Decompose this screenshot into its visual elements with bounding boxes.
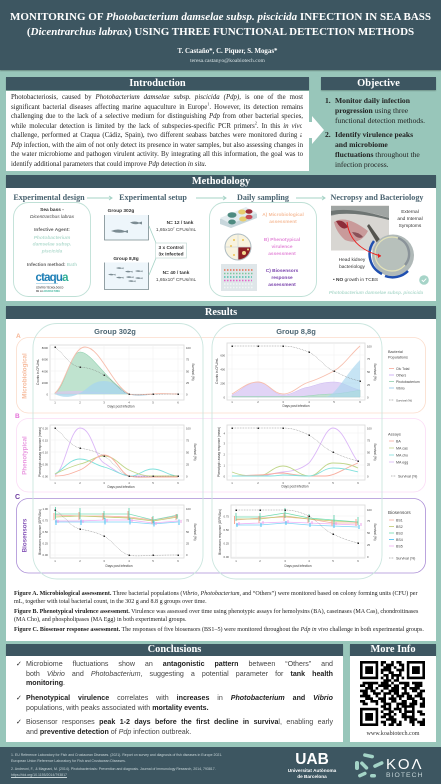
chart: C 302g: 50	[186, 530, 190, 534]
panel: experimental design box: ctaqua	[36, 272, 69, 284]
chart: C 8,8g: Survival (%)	[373, 523, 377, 541]
chart: C 8,8g: 5	[332, 559, 334, 563]
panel: introduction text: Pdp infection, with the aim of not only detect its presence in water samples, but also assessing changes in	[11, 142, 303, 148]
symptoms label	[397, 209, 423, 229]
heading: more info: More Info	[370, 644, 416, 655]
chart: A 8,8g: 25	[367, 383, 371, 387]
panel: conclusions	[6, 656, 343, 742]
panel: daily sampling box: assessment	[269, 219, 297, 225]
objective list: 2.	[325, 130, 331, 139]
objective list: and microbiome	[335, 140, 388, 149]
chart: B 302g: 2	[79, 481, 81, 485]
chart: B 8,8g: 1	[223, 464, 225, 468]
heading: experimental design: Experimental design	[13, 193, 85, 202]
chart: B 8,8g: 0	[223, 474, 225, 478]
heading: methodology	[6, 175, 436, 188]
chart: A 302g: 4000	[42, 370, 48, 374]
chart: B 302g: 5	[152, 481, 154, 485]
chart: A 302g: 50	[186, 370, 190, 374]
panel: experimental design box: Photobacterium	[34, 235, 71, 241]
references	[11, 752, 222, 778]
chart: B 302g: 4	[128, 481, 130, 485]
panel: experimental design box: DE LA ACUICULTURA	[36, 290, 60, 293]
chart: C 8,8g	[218, 505, 377, 568]
group 302g tank: Group 302g	[108, 208, 134, 214]
setup numbers: 7	[173, 226, 175, 230]
chart: A 8,8g: 0	[223, 396, 225, 400]
chart: B 8,8g: 75	[367, 438, 371, 442]
references: 1. EU Reference Laboratory for Fish and Crustacean Diseases. (2021). Report on survey and diagnosis of fish diseases in Europe 2021.	[11, 752, 222, 756]
row frame A microbiological: A	[16, 333, 21, 340]
figure captions: mL, together with total bacterial count, in the 302 g and 8.8 g groups over time.	[14, 599, 207, 605]
legend: biosensors: BS2	[396, 525, 403, 529]
references: European Union Reference Laboratory for Fish and Crustacean Diseases.	[11, 758, 126, 762]
panel: conclusions: populations, with peaks associated with mortality events.	[26, 704, 209, 712]
chart: C 302g: 6	[177, 559, 179, 563]
panel: daily sampling box: assessment	[268, 251, 296, 257]
chart: B 8,8g: 4	[223, 432, 225, 436]
symptoms label: External	[401, 209, 419, 215]
group frame 8,8g: Group 8,8g	[276, 327, 316, 336]
group 8,8g tank: Group 8,8g	[113, 256, 139, 262]
icon: culture plate	[220, 207, 257, 228]
panel: introduction text	[6, 91, 309, 171]
chart: C 302g: 1	[54, 559, 56, 563]
chart: C 302g: Survival (%)	[193, 523, 197, 541]
chart: C 8,8g: 3	[284, 559, 286, 563]
chart: A 8,8g: 200	[220, 382, 225, 386]
objective list: infection process.	[335, 160, 389, 168]
no growth note: • NO growth in TCBS	[333, 277, 378, 283]
authors: T. Castaño*, C. Piquer, S. Mogas*	[178, 48, 277, 55]
chart: A 302g	[36, 345, 195, 408]
chart: B 8,8g: 25	[367, 462, 371, 466]
references: https://doi.org/10.1155/2014/793817	[11, 773, 67, 777]
row frame A microbiological: Microbiological	[22, 353, 28, 399]
chart: A 302g: 6	[177, 400, 179, 404]
heading: experimental setup: Experimental setup	[119, 193, 187, 202]
chart: B 302g: 0.10	[43, 450, 48, 454]
chart: B 302g: 0.00	[43, 474, 48, 478]
chart: A 302g: 2000	[42, 381, 48, 385]
logo: KOA Biotech	[355, 753, 423, 779]
chart: C 8,8g: 50	[367, 531, 371, 535]
chart: C 302g	[38, 505, 197, 568]
head kidney label: Head kidney	[339, 257, 366, 263]
chart: A 8,8g	[215, 343, 377, 408]
arrow: introduction to objective	[302, 116, 324, 144]
heading: necropsy and bacteriology: Necropsy and Bacteriology	[331, 193, 423, 202]
legend: assays: MA egg	[396, 460, 408, 464]
chart: B 302g: 75	[186, 438, 190, 442]
panel: daily sampling box: A) Microbiological	[262, 212, 304, 218]
legend: biosensors	[388, 510, 415, 560]
setup numbers: 1,65x10	[156, 228, 173, 233]
heading: daily sampling: Daily sampling	[237, 193, 289, 202]
legend: biosensors: BS1	[396, 518, 403, 522]
panel: daily sampling box: assessment	[268, 282, 296, 288]
chart: A 8,8g: 600	[220, 354, 225, 358]
chart: A 302g: 2	[79, 400, 81, 404]
group frame 8,8g	[212, 324, 382, 579]
objective list: fluctuations throughout the	[335, 150, 420, 159]
title: (Dicentrarchus labrax) USING THREE FUNCTIONAL DETECTION METHODS	[27, 26, 414, 38]
legend: bacterial populations: Vibrio	[396, 386, 405, 390]
header band	[0, 0, 441, 70]
chart: C 8,8g: 0.75	[224, 514, 229, 518]
chart: A 8,8g: 0	[367, 396, 369, 400]
chart: C 302g: 5	[152, 559, 154, 563]
panel: experimental design box: Infective Agent:	[34, 227, 70, 233]
chart: B 8,8g: 4	[308, 481, 310, 485]
footer band	[0, 747, 441, 784]
chart: C 8,8g: 0	[367, 555, 369, 559]
setup numbers: N= 40 / tank	[163, 270, 190, 276]
chart: A 302g: 100	[186, 346, 191, 350]
chart: C 302g: 0	[186, 553, 188, 557]
figure captions	[14, 590, 424, 633]
panel: introduction text: while molecular detection is limited by the lack of subspecies-specific PCR primers2. In this in vivo	[11, 120, 303, 130]
panel: experimental design box: CENTRO TECNOLÓGICO	[36, 286, 64, 290]
panel: conclusions: ✓	[16, 694, 22, 702]
row frame B phenotypical: Phenotypical	[22, 436, 28, 475]
control and infected box: 3x Infected	[158, 252, 184, 258]
photo: necropsy of fish	[331, 206, 389, 250]
chart: B 8,8g: 2	[257, 481, 259, 485]
heading: conclusions: Conclusions	[148, 644, 201, 655]
chart: A 302g: 5	[152, 400, 154, 404]
row frame B phenotypical: B	[15, 413, 20, 420]
chart: C 8,8g: 0.25	[224, 542, 229, 546]
legend: assays: BA	[396, 440, 401, 444]
heading: introduction	[6, 77, 309, 90]
row frame B phenotypical	[15, 413, 426, 492]
logo: KOA Biotech: KOΛ	[386, 756, 423, 773]
heading: objective: Objective	[357, 78, 400, 89]
panel: experimental design box: damselae subsp.	[33, 242, 71, 248]
chart: B 302g: 100	[186, 426, 191, 430]
chart: B 8,8g: 50	[367, 450, 371, 454]
panel: experimental design box: Dicentrarchus labrax	[30, 214, 75, 220]
heading: more info	[350, 644, 436, 656]
figure captions: Figure A. Microbiological assessment. Three bacterial populations (Vibrio, Photobacterium, and “Others”) were monitored based on colony forming units (CFU) per	[14, 591, 417, 597]
arrow: sampling to necropsy	[296, 196, 325, 200]
chart: A 8,8g: 400	[220, 368, 225, 372]
legend: biosensors: BS3	[396, 532, 403, 536]
chart: C 302g: 2	[79, 559, 81, 563]
species label: Photobacterium damselae subsp. piscicida	[329, 290, 424, 295]
chart: C 8,8g: 0.50	[224, 528, 229, 532]
legend: bacterial populations: Photobacterium	[396, 380, 420, 384]
symptoms label: and Internal	[397, 216, 423, 222]
logo: UAB: Universitat Autònoma	[288, 768, 336, 773]
chart: B 302g: 0.15	[43, 438, 48, 442]
logo: UAB: UAB	[295, 751, 329, 768]
email: teresa.castanyo@koabiotech.com	[190, 58, 265, 64]
control and infected box	[149, 226, 186, 275]
panel: experimental design box: piscicida	[41, 248, 63, 254]
chart: B 8,8g: 2	[223, 452, 225, 456]
setup numbers: CFUs/mL	[175, 227, 196, 233]
panel: introduction text: Photobacteriosis, caused by Photobacterium damselae subsp. piscicida (Pdp), is one of the most	[11, 94, 303, 101]
panel: conclusions: ✓	[16, 718, 22, 726]
chart: C 8,8g: 2	[259, 559, 261, 563]
legend: bacterial populations: Bacterial	[388, 350, 403, 354]
chart: C 8,8g: 0.00	[224, 555, 229, 559]
row frame C biosensors	[15, 494, 426, 573]
legend: bacterial populations: Others	[396, 374, 406, 378]
chart: B 8,8g: Survival (%)	[373, 443, 377, 461]
heading: methodology: Methodology	[192, 176, 250, 187]
heading: results: Results	[205, 307, 237, 318]
chart: A 8,8g: Counts in CFU/mL	[215, 358, 219, 384]
legend: bacterial populations: Populations	[388, 356, 408, 360]
chart: B 302g: 0.05	[43, 462, 48, 466]
chart: A 302g: 75	[186, 358, 190, 362]
chart: A 8,8g: 4	[308, 400, 310, 404]
panel: conclusions: ✓	[16, 660, 22, 668]
chart: B 8,8g: 0	[367, 474, 369, 478]
chart: B 8,8g: 3	[282, 481, 284, 485]
chart: B 302g: Days post infection	[108, 485, 135, 489]
title: MONITORING OF Photobacterium damselae subsp. piscicida INFECTION IN SEA BASS	[10, 11, 431, 23]
chart: B 302g: Survival (%)	[193, 443, 197, 461]
panel: daily sampling box	[210, 202, 316, 296]
legend: assays	[388, 432, 417, 478]
figure captions: (MA Cho), and phospholipases (MA Egg) in both experimental groups.	[14, 617, 186, 623]
chart: B 8,8g: Days post infection	[282, 484, 309, 488]
chart: A 8,8g: 50	[367, 370, 371, 374]
chart: B 8,8g: 6	[357, 481, 359, 485]
chart: C 302g: 3	[103, 559, 105, 563]
icon: microplate	[221, 264, 257, 291]
objective list: Monitor daily infection	[335, 96, 410, 105]
icon: check badge	[419, 275, 429, 285]
objective list	[325, 96, 425, 168]
chart: A 302g: 0	[186, 392, 188, 396]
chart: A 8,8g: 6	[359, 400, 361, 404]
panel: introduction text: the water microbiome and pathogen virulent activity. By integrating all this information, the goal was to	[11, 151, 303, 158]
panel: experimental design box	[14, 202, 90, 296]
objective list: functional detection methods.	[335, 116, 425, 124]
panel: introduction text: challenging due to the lack of a selective medium for distinguishing Pdp from other bacterial species,	[11, 113, 303, 120]
chart: C 8,8g: Biosensors response (GFP/Abs)	[218, 509, 222, 555]
chart: C 302g: Biosensors response (GFP/Abs)	[38, 509, 42, 555]
control and infected box: 3 x Control	[158, 245, 184, 251]
chart: B 302g: 3	[103, 481, 105, 485]
arrow: setup to sampling	[196, 196, 226, 200]
objective list: Identify virulence peaks	[335, 130, 413, 139]
chart: A 302g: 0	[46, 392, 48, 396]
panel: introduction text: challenge, performed at Ctaqua (Cádiz, Spain), two different seabass batches were monitored during a	[11, 132, 303, 139]
chart: B 8,8g: 3	[223, 442, 225, 446]
title	[10, 11, 431, 38]
website: www.koabiotech.com	[366, 731, 420, 737]
panel: conclusions: both Vibrio and Photobacterium, suggesting a potential parameter for tank health	[26, 670, 333, 678]
panel: results	[6, 319, 436, 641]
chart: B 302g: 1	[54, 481, 56, 485]
chart: B 302g	[38, 425, 197, 489]
symptoms label: Symptoms	[399, 223, 422, 229]
panel: daily sampling box: virulence	[271, 244, 293, 250]
chart: C 302g: 25	[186, 542, 190, 546]
legend: bacterial populations	[388, 350, 420, 402]
chart: A 302g: Days post infection	[108, 404, 135, 408]
setup numbers: CFUs/mL	[175, 277, 196, 283]
chart: C 302g: 1.00	[43, 507, 48, 511]
chart: A 8,8g: Survival (%)	[373, 363, 377, 381]
chart: C 8,8g: Days post infection	[285, 564, 312, 568]
chart: B 8,8g	[217, 425, 377, 488]
chart: C 8,8g: 100	[367, 508, 372, 512]
chart: C 302g: Days post infection	[106, 564, 133, 568]
chart: A 302g: 6000	[42, 358, 48, 362]
chart: A 8,8g: 1	[231, 400, 233, 404]
legend: biosensors: BS5	[396, 544, 403, 548]
panel: conclusions: Microbiome fluctuations show an antagonistic pattern between “Others” and	[26, 660, 333, 668]
panel: daily sampling box: C) Biosensors	[266, 268, 299, 274]
panel: introduction text: identify additional parameters that could improve Pdp detection in situ.	[11, 160, 206, 168]
panel: conclusions: monitoring.	[26, 679, 65, 687]
heading: objective	[321, 77, 436, 90]
chart: C 302g: 100	[186, 507, 191, 511]
panel: daily sampling box: B) Phenotypical	[264, 237, 300, 243]
chart: B 302g: Phenotypic assay response (mean)	[38, 427, 42, 477]
figure captions: Figure B. Phenotypical virulence assessment. Virulence was assessed over time using phenotypic assays for hemolysins (BA), caseinases (MA Cas), chondroitinases	[14, 609, 418, 615]
chart: A 302g: 25	[186, 381, 190, 385]
chart: A 302g: 1	[54, 400, 56, 404]
panel: conclusions: Biosensor responses peak 1-2 days before the first decline in survival, enabling early	[26, 718, 333, 726]
chart: B 302g: 0	[186, 474, 188, 478]
chart: A 8,8g: Days post infection	[283, 404, 310, 408]
panel: experimental design box: Sea bass -	[40, 207, 64, 213]
chart: A 8,8g: 2	[257, 400, 259, 404]
panel: introduction text: significant bacterial diseases affecting marine aquaculture in Europe1. However, its detection remains	[11, 101, 303, 110]
setup numbers: 1,65x10	[156, 278, 173, 283]
legend: biosensors: BS4	[396, 538, 403, 542]
group 8,8g tank	[104, 256, 148, 290]
row frame A microbiological	[16, 333, 426, 413]
legend: assays: MA cas	[396, 446, 408, 450]
panel: daily sampling box: response	[271, 275, 293, 281]
legend: assays: Assays	[388, 432, 401, 436]
chart: A 302g: 8000	[42, 346, 48, 350]
chart: A 302g: Survival (%)	[191, 363, 195, 381]
panel: conclusions: and preventive detection of Pdp infection outbreak.	[26, 728, 191, 736]
chart: C 302g: 0.75	[43, 518, 48, 522]
group frame 302g: Group 302g	[94, 327, 136, 336]
panel: methodology	[6, 188, 436, 301]
setup numbers: N= 12 / tank	[167, 220, 194, 226]
heading: introduction: Introduction	[129, 78, 186, 89]
logo: UAB	[288, 751, 336, 779]
chart: A 302g: 3	[103, 400, 105, 404]
QR code	[360, 661, 425, 726]
chart: C 8,8g: 25	[367, 543, 371, 547]
chart: C 302g: 0.50	[43, 530, 48, 534]
chart: B 8,8g: Phenotypic assay response (mean)	[217, 427, 221, 477]
chart: C 302g: 75	[186, 518, 190, 522]
chart: C 302g: 0.00	[43, 553, 48, 557]
chart: C 302g: 4	[128, 559, 130, 563]
setup numbers	[156, 220, 196, 283]
legend: biosensors: Biosensors	[388, 510, 411, 515]
objective list: progression using three	[335, 106, 408, 115]
references: 2. Andreoni, F., & Magnani, M. (2014). Photobacteriosis: Prevention and diagnosis. Journal of Immunology Research, 2014, 793817.	[11, 767, 216, 771]
chart: C 8,8g: 6	[357, 559, 359, 563]
head kidney label	[339, 257, 366, 270]
panel: experimental design box: Infection method: Bath	[27, 262, 77, 267]
panel: conclusions: Phenotypical virulence correlates with increases in Photobacterium and Vibrio	[26, 694, 333, 702]
logo: KOA Biotech: BIOTECH	[386, 772, 423, 779]
chart: C 302g: 0.25	[43, 542, 48, 546]
chart: A 302g: 4	[128, 400, 130, 404]
heading: conclusions	[6, 644, 343, 656]
icon: petri dish	[225, 234, 251, 260]
legend: assays: Survival (%)	[398, 474, 417, 478]
panel: more info	[350, 656, 436, 742]
group 302g tank	[104, 208, 148, 240]
legend: bacterial populations: Cfu Total	[396, 367, 410, 371]
arrow: design to setup	[87, 196, 112, 200]
chart: B 302g: 0.20	[43, 426, 48, 430]
figure captions: Figure C. Biosensor response assessment. The responses of five biosensors (BS1–5) were monitored throughout the Pdp in vivo challenge in both experimental groups.	[14, 627, 424, 633]
chart: A 8,8g: 3	[282, 400, 284, 404]
photo: head kidney bacteriology plate	[347, 222, 414, 277]
head kidney label: bacteriology	[339, 264, 366, 270]
row frame C biosensors: Biosensors	[22, 518, 28, 552]
chart: B 8,8g: 5	[332, 481, 334, 485]
chart: A 302g: Counts in CFU/mL	[36, 359, 40, 385]
chart: C 8,8g: 4	[308, 559, 310, 563]
chart: A 8,8g: 75	[367, 357, 371, 361]
chart: B 302g: 25	[186, 462, 190, 466]
chart: A 8,8g: 5	[333, 400, 335, 404]
group frame 302g	[33, 324, 203, 579]
chart: B 302g: 6	[177, 481, 179, 485]
chart: C 8,8g: 1	[235, 559, 237, 563]
legend: assays: MA cho	[396, 454, 408, 458]
heading: results	[6, 306, 436, 319]
legend: bacterial populations: Survival (%)	[396, 398, 412, 402]
chart: C 8,8g: 75	[367, 519, 371, 523]
logo: UAB: de Barcelona	[297, 774, 327, 779]
objective list: 1.	[325, 96, 331, 105]
chart: B 8,8g: 1	[231, 481, 233, 485]
chart: A 8,8g: 100	[367, 344, 372, 348]
chart: B 302g: 50	[186, 450, 190, 454]
setup numbers: 4	[173, 276, 175, 280]
row frame C biosensors: C	[15, 494, 20, 501]
legend: biosensors: Survival (%)	[396, 556, 415, 560]
chart: B 8,8g: 100	[367, 426, 372, 430]
